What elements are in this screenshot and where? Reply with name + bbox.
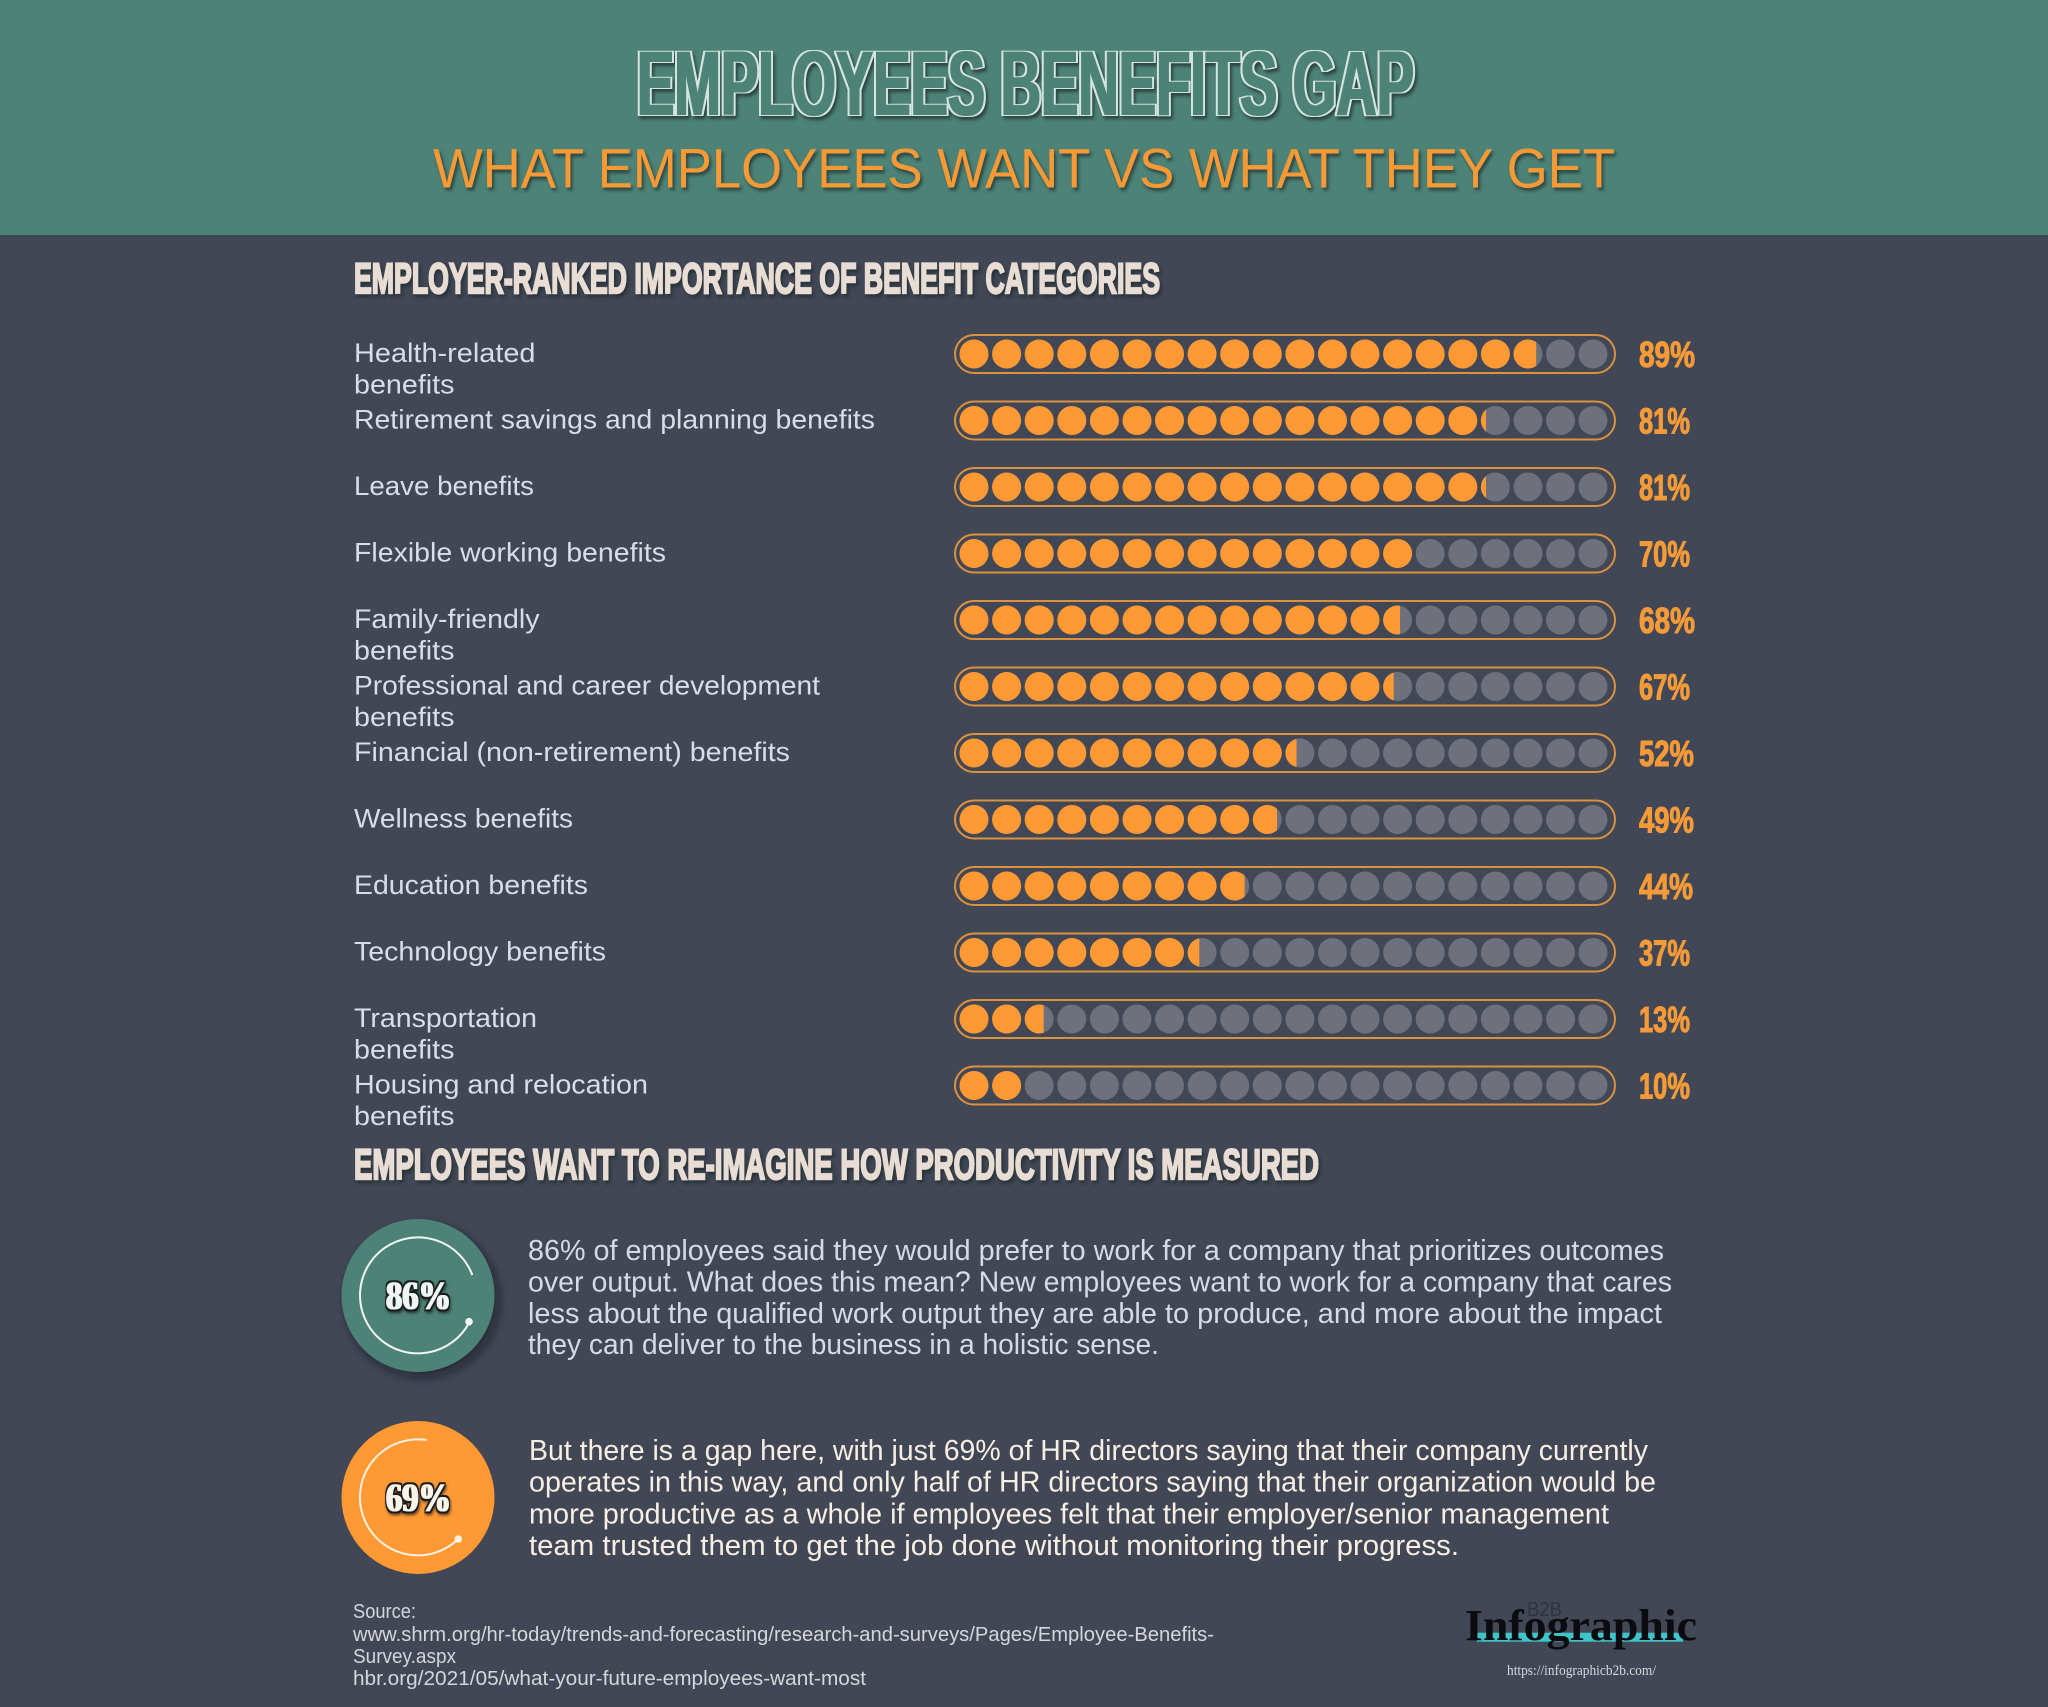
- row: leave 81%: [354, 467, 1690, 508]
- source notes: www.shrm.org/hr-today/trends-and-forecasting/research-and-surveys/Pages/Employee-Benefits-: [352, 1624, 1214, 1646]
- row: education 44%: [354, 866, 1693, 907]
- logo: B2B Infographic: [1465, 1599, 1697, 1679]
- row: education 44%: 44%: [1639, 866, 1693, 907]
- text block: 69% paragraph: operates in this way, and only half of HR directors saying that their organization would be: [529, 1466, 1656, 1498]
- text block: 86% paragraph: 86% of employees said they would prefer to work for a company that prioritizes outcomes: [528, 1235, 1664, 1267]
- text block: 86% paragraph: [528, 1235, 1672, 1361]
- row: wellness 49%: 49%: [1639, 800, 1694, 840]
- row: professional and career 67%: Professional and career development: [354, 670, 821, 700]
- logo: B2B Infographic: Infographic: [1465, 1601, 1697, 1650]
- heading: productivity: EMPLOYEES WANT TO RE-IMAGINE HOW PRODUCTIVITY IS MEASURED: [354, 1141, 1319, 1189]
- row: professional and career 67%: 67%: [1639, 666, 1690, 708]
- row: technology 37%: [354, 932, 1690, 974]
- row: housing and relocation 10%: benefits: [354, 1101, 454, 1131]
- panel: benefit category chart: [354, 334, 1695, 1131]
- row: family-friendly 68%: benefits: [354, 636, 454, 666]
- header banner: [0, 0, 2048, 235]
- row: technology 37%: Technology benefits: [354, 936, 606, 966]
- logo: B2B Infographic: B2B: [1527, 1599, 1562, 1621]
- row: leave 81%: 81%: [1639, 467, 1690, 508]
- text block: 69% paragraph: But there is a gap here, with just 69% of HR directors saying that their company currently: [529, 1435, 1648, 1467]
- title: EMPLOYEES BENEFITS GAP: [637, 33, 1414, 135]
- source notes: Survey.aspx: [353, 1646, 456, 1668]
- row: financial 52%: 52%: [1639, 733, 1694, 774]
- text block: 69% paragraph: team trusted them to get the job done without monitoring their progress.: [529, 1530, 1459, 1562]
- row: financial 52%: [354, 733, 1694, 774]
- icon: 69% dial: [342, 1421, 494, 1574]
- row: family-friendly 68%: Family-friendly: [354, 604, 540, 634]
- row: flexible working 70%: [354, 534, 1690, 574]
- source notes: [352, 1601, 1214, 1690]
- row: health-related 89%: benefits: [354, 370, 454, 400]
- source notes: hbr.org/2021/05/what-your-future-employees-want-most: [353, 1668, 866, 1690]
- row: professional and career 67%: [354, 666, 1690, 732]
- row: wellness 49%: [354, 800, 1694, 840]
- text block: 86% paragraph: over output. What does this mean? New employees want to work for a company that cares: [528, 1266, 1672, 1298]
- row: education 44%: Education benefits: [354, 870, 588, 900]
- row: housing and relocation 10%: Housing and relocation: [354, 1070, 648, 1100]
- row: transportation 13%: 13%: [1639, 999, 1690, 1040]
- row: flexible working 70%: 70%: [1639, 534, 1690, 574]
- row: retirement 81%: 81%: [1639, 400, 1690, 442]
- row: technology 37%: 37%: [1639, 932, 1690, 974]
- row: professional and career 67%: benefits: [354, 702, 454, 732]
- row: transportation 13%: [354, 999, 1690, 1064]
- row: wellness 49%: Wellness benefits: [354, 804, 573, 834]
- row: flexible working 70%: Flexible working benefits: [354, 538, 666, 568]
- row: housing and relocation 10%: [354, 1066, 1690, 1131]
- text block: 69% paragraph: [529, 1435, 1656, 1562]
- row: family-friendly 68%: 68%: [1639, 600, 1695, 641]
- row: health-related 89%: 89%: [1639, 334, 1695, 375]
- row: family-friendly 68%: [354, 600, 1695, 666]
- row: transportation 13%: benefits: [354, 1034, 454, 1064]
- icon: 86% dial: 86%: [386, 1273, 451, 1318]
- row: transportation 13%: Transportation: [354, 1003, 537, 1033]
- row: housing and relocation 10%: 10%: [1639, 1066, 1690, 1106]
- subtitle: WHAT EMPLOYEES WANT VS WHAT THEY GET: [433, 136, 1615, 200]
- row: retirement 81%: Retirement savings and planning benefits: [354, 404, 875, 434]
- heading: benefit categories: EMPLOYER-RANKED IMPORTANCE OF BENEFIT CATEGORIES: [354, 255, 1160, 303]
- text block: 86% paragraph: they can deliver to the business in a holistic sense.: [528, 1329, 1159, 1361]
- icon: 86% dial: [342, 1219, 494, 1372]
- source notes: Source:: [353, 1601, 416, 1623]
- row: leave 81%: Leave benefits: [354, 471, 534, 501]
- text block: 86% paragraph: less about the qualified work output they are able to produce, and more about the impact: [528, 1298, 1662, 1330]
- text block: 69% paragraph: more productive as a whole if employees felt that their employer/senior management: [529, 1498, 1609, 1530]
- icon: 69% dial: 69%: [386, 1475, 451, 1520]
- logo: B2B Infographic: https://infographicb2b.com/: [1507, 1663, 1657, 1679]
- row: health-related 89%: Health-related: [354, 338, 536, 368]
- row: financial 52%: Financial (non-retirement) benefits: [354, 737, 790, 767]
- row: health-related 89%: [354, 334, 1695, 400]
- row: retirement 81%: [354, 400, 1690, 442]
